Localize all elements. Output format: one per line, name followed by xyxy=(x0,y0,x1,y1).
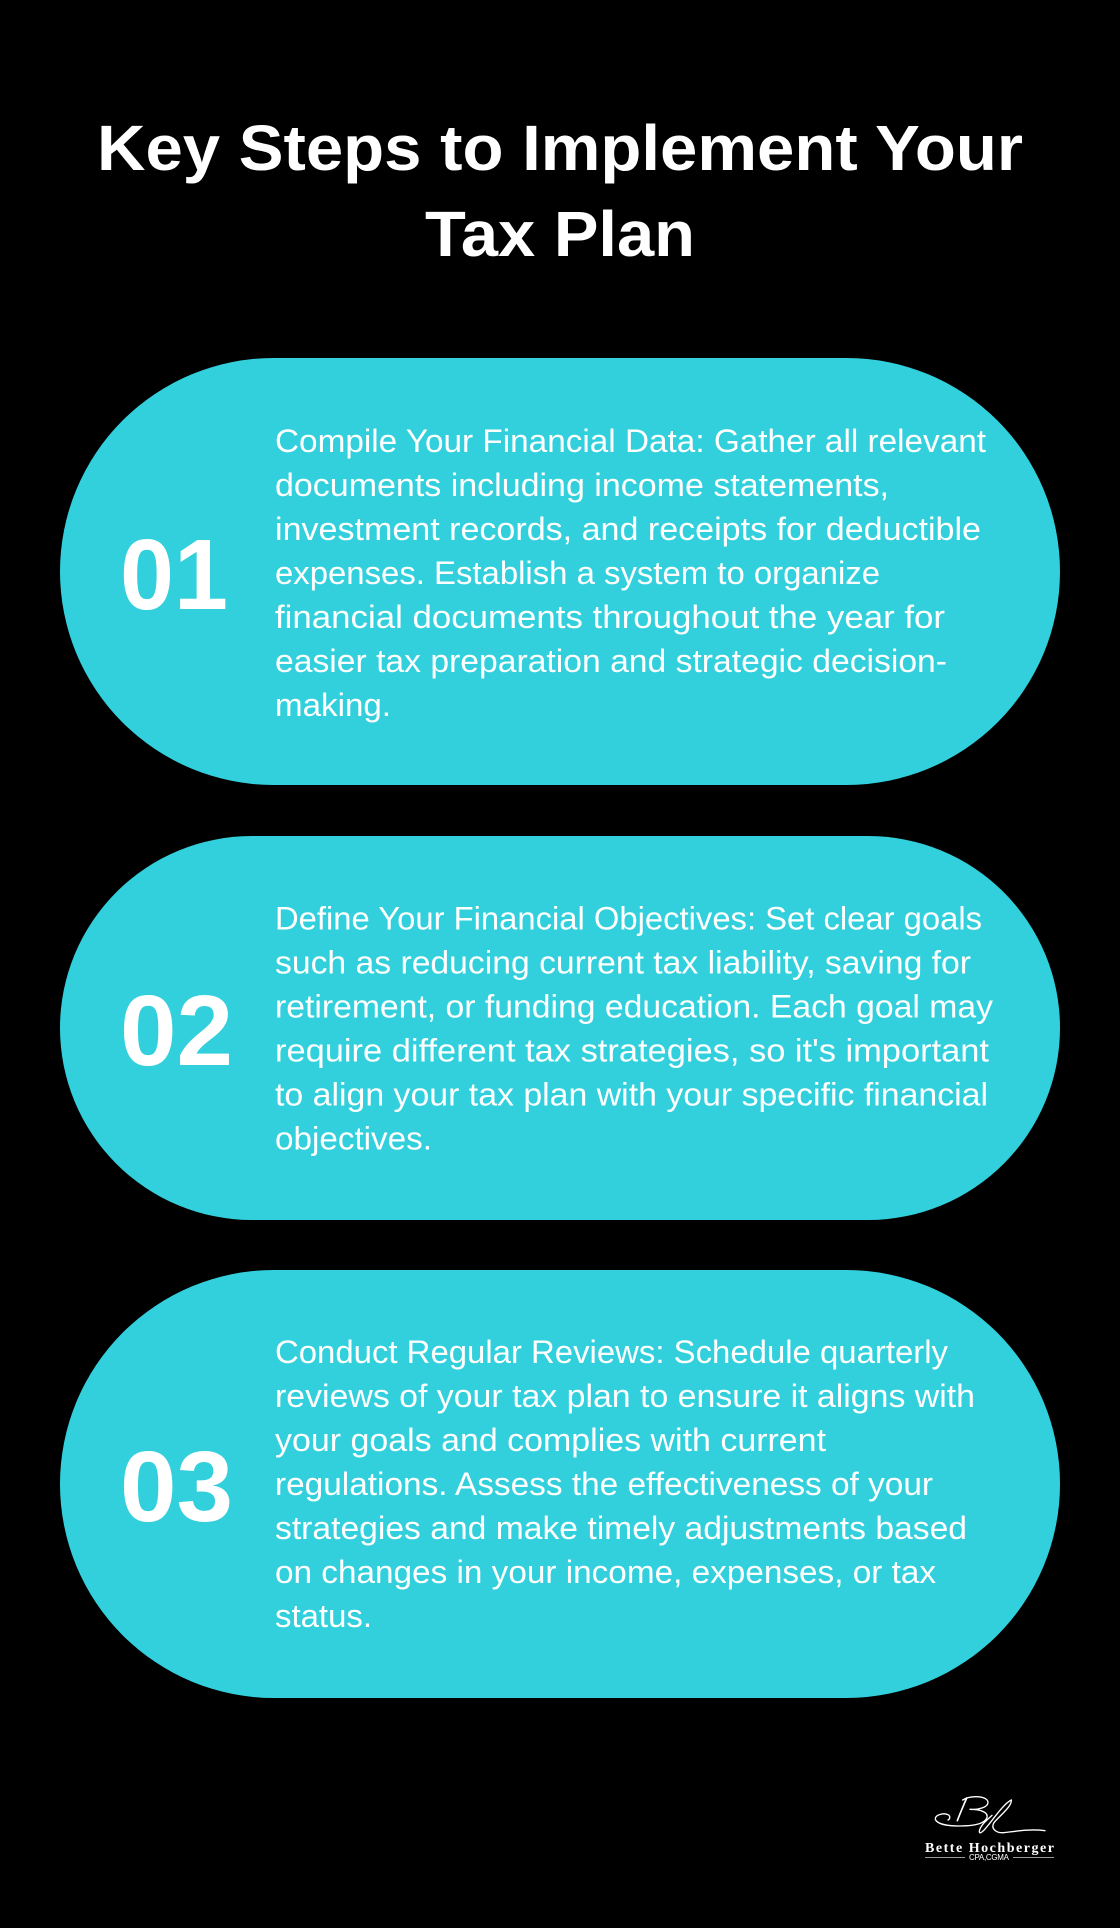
text: define your financial objectives xyxy=(275,900,993,1156)
text: define your financial objectives: retirement, or funding education. Each goal may xyxy=(275,988,993,1024)
text: conduct regular reviews: reviews of your tax plan to ensure it aligns with xyxy=(275,1378,975,1414)
text: define your financial objectives: to align your tax plan with your specific financial xyxy=(275,1076,988,1112)
text: compile your financial data xyxy=(275,423,986,723)
text: conduct regular reviews: Conduct Regular Reviews: Schedule quarterly xyxy=(275,1334,948,1370)
text: conduct regular reviews: regulations. Assess the effectiveness of your xyxy=(275,1466,933,1502)
panel: step 03 xyxy=(60,1270,1060,1698)
title: Key Steps to Implement Your xyxy=(97,112,1023,184)
text: conduct regular reviews: your goals and complies with current xyxy=(275,1422,826,1458)
credentials: CPA,CGMA xyxy=(969,1853,1010,1862)
text: compile your financial data: investment records, and receipts for deductible xyxy=(275,511,981,547)
panel: step 02 xyxy=(60,836,1060,1220)
text: conduct regular reviews: strategies and make timely adjustments based xyxy=(275,1510,967,1546)
logo: Bette Hochberger signature xyxy=(925,1797,1054,1862)
text: compile your financial data: easier tax preparation and strategic decision- xyxy=(275,643,947,679)
text: define your financial objectives: objectives. xyxy=(275,1120,432,1156)
number 02: 02 xyxy=(120,975,233,1087)
text: conduct regular reviews: status. xyxy=(275,1598,372,1634)
text: compile your financial data: financial documents throughout the year for xyxy=(275,599,945,635)
title xyxy=(97,112,1023,270)
text: define your financial objectives: such as reducing current tax liability, saving for xyxy=(275,944,971,980)
text: compile your financial data: Compile Your Financial Data: Gather all relevant xyxy=(275,423,986,459)
text: compile your financial data: documents including income statements, xyxy=(275,467,889,503)
name: Bette Hochberger xyxy=(925,1841,1054,1856)
text: conduct regular reviews: on changes in your income, expenses, or tax xyxy=(275,1554,936,1590)
text: define your financial objectives: require different tax strategies, so it's important xyxy=(275,1032,989,1068)
text: compile your financial data: expenses. Establish a system to organize xyxy=(275,555,880,591)
icon: BH signature xyxy=(935,1797,1045,1833)
number 03: 03 xyxy=(120,1431,233,1543)
text: define your financial objectives: Define Your Financial Objectives: Set clear goals xyxy=(275,900,982,936)
text: conduct regular reviews xyxy=(275,1334,975,1634)
number 01: 01 xyxy=(120,519,228,631)
text: compile your financial data: making. xyxy=(275,687,391,723)
title: Tax Plan xyxy=(425,198,695,270)
panel: step 01 xyxy=(60,358,1060,785)
